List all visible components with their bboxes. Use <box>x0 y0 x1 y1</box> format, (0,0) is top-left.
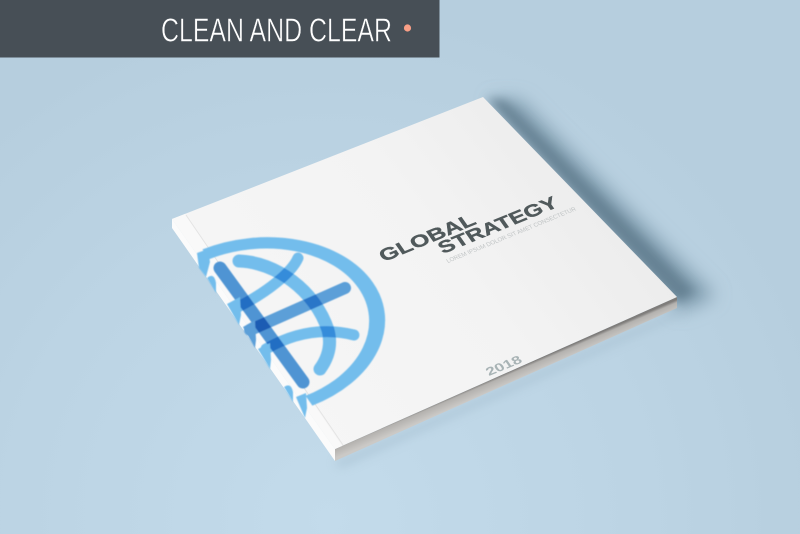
globe logo <box>197 212 417 418</box>
title: STRATEGY: STRATEGY <box>433 192 563 257</box>
logo meridian curve <box>239 261 330 369</box>
logo upper curve <box>236 258 298 308</box>
book shadow <box>335 98 715 468</box>
book front cover <box>172 97 677 449</box>
book spine side <box>172 219 335 461</box>
logo vertical bar <box>220 268 303 382</box>
logo outer ring <box>206 212 417 401</box>
spine stitches <box>197 249 307 418</box>
logo lower curve <box>266 332 354 349</box>
banner dot <box>404 24 411 32</box>
logo horizontal bar <box>250 288 345 330</box>
banner title: CLEAN AND CLEAR <box>161 12 392 48</box>
title: GLOBAL: GLOBAL <box>374 210 480 265</box>
spine hinge band <box>172 214 342 449</box>
year: 2018 <box>483 353 525 378</box>
book <box>172 97 677 461</box>
subtitle: LOREM IPSUM DOLOR SIT AMET CONSECTETUR <box>445 206 578 265</box>
book page edge <box>335 297 677 461</box>
header banner <box>0 0 440 58</box>
